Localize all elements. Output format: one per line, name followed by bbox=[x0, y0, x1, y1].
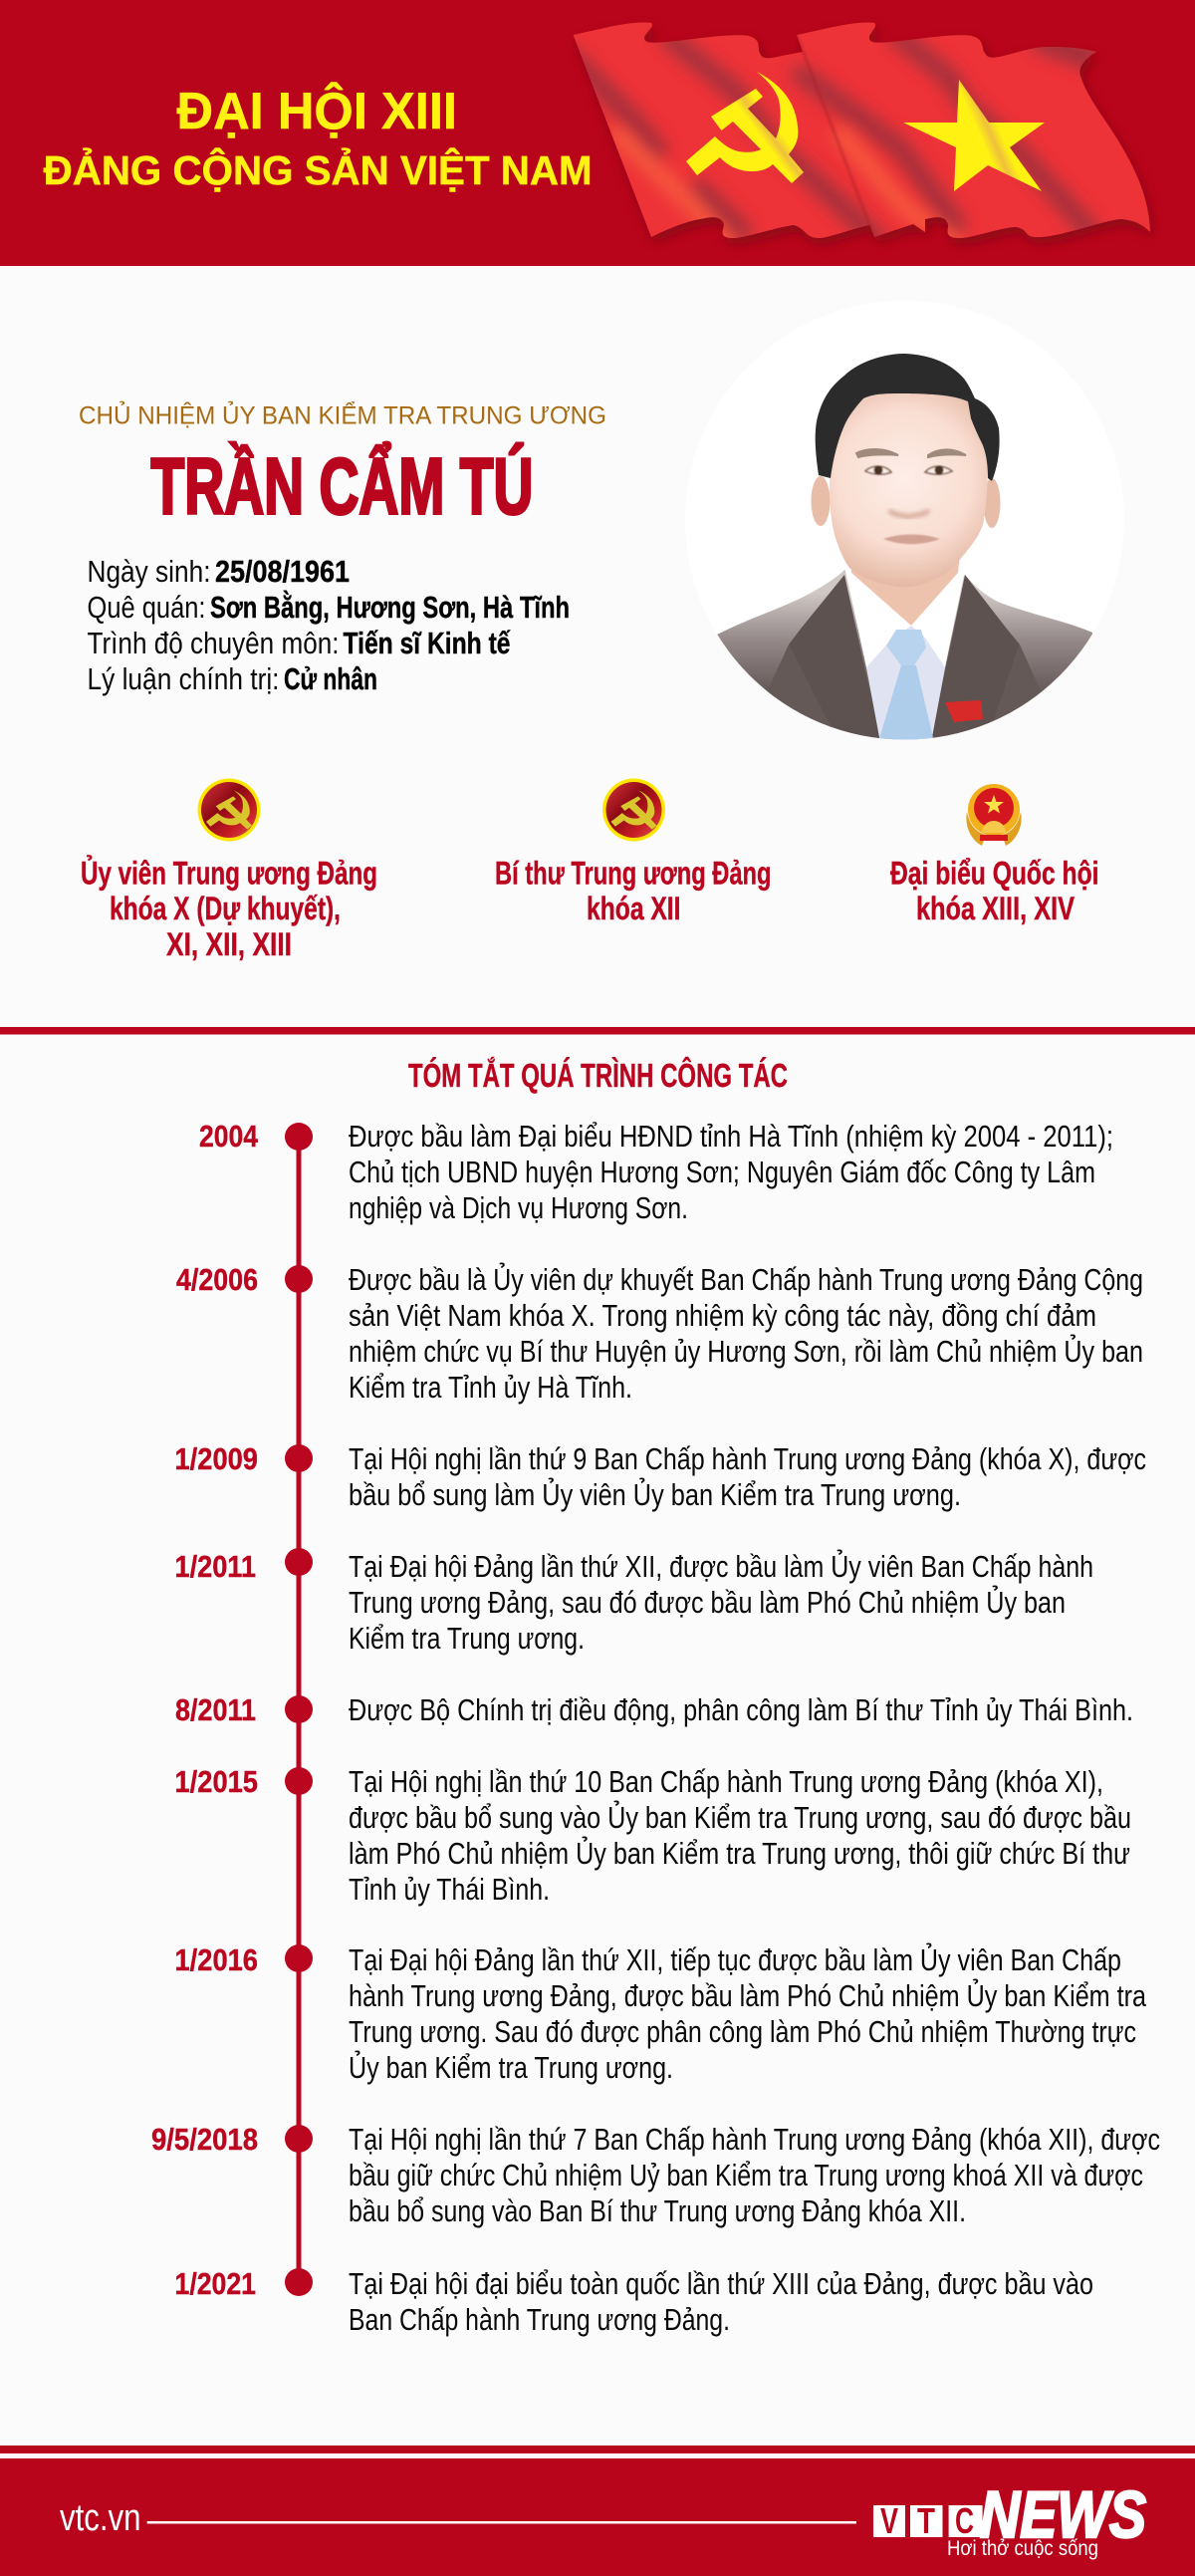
entry: 1/2021 bbox=[175, 2266, 1093, 2337]
timeline spine bbox=[297, 1137, 301, 2282]
logo: VTC News: T bbox=[917, 2500, 935, 2541]
footer bbox=[0, 2446, 1195, 2576]
timeline heading: TÓM TẮT QUÁ TRÌNH CÔNG TÁC bbox=[408, 1056, 788, 1094]
logo: VTC News: C bbox=[955, 2500, 974, 2541]
hair bbox=[816, 354, 1000, 481]
entry: 1/2021: Ban Chấp hành Trung ương Đảng. bbox=[349, 2303, 730, 2337]
role: central committee member: XI, XII, XIII bbox=[166, 926, 292, 962]
icon: party emblem bbox=[197, 779, 261, 841]
ears bbox=[811, 476, 831, 526]
role: central committee secretary: Bí thư Trung ương Đảng bbox=[495, 855, 771, 891]
icon: national emblem bbox=[966, 784, 1022, 846]
entry: 1/2015: 1/2015 bbox=[175, 1764, 258, 1799]
entry: 4/2006 bbox=[176, 1261, 1143, 1405]
jacket bbox=[717, 570, 1093, 739]
entry: 1/2015 bbox=[175, 1764, 1131, 1907]
role: central committee member: khóa X (Dự khuyết), bbox=[110, 891, 341, 926]
role: central committee secretary: khóa XII bbox=[587, 891, 681, 926]
portrait bbox=[717, 354, 1093, 739]
entry: 4/2006: 4/2006 bbox=[176, 1262, 258, 1297]
brows bbox=[856, 449, 898, 457]
entry: 1/2016 bbox=[175, 1941, 1146, 2085]
logo: VTC News bbox=[873, 2477, 1146, 2560]
site url: vtc.vn bbox=[60, 2497, 141, 2539]
entry: 1/2011: 1/2011 bbox=[175, 1549, 256, 1584]
role: national assembly deputy: khóa XIII, XIV bbox=[916, 891, 1076, 926]
name heading: TRẦN CẨM TÚ bbox=[151, 442, 534, 530]
logo: VTC News: NEWS bbox=[980, 2477, 1146, 2551]
icon: star bbox=[903, 80, 1045, 191]
subtitle: position: CHỦ NHIỆM ỦY BAN KIỂM TRA TRUNG ƯƠNG bbox=[79, 400, 606, 430]
entry: 9/5/2018: 9/5/2018 bbox=[151, 2122, 258, 2157]
entry: 9/5/2018 bbox=[151, 2122, 1160, 2228]
role: national assembly deputy: Đại biểu Quốc hội bbox=[890, 855, 1099, 891]
mouth bbox=[883, 534, 940, 544]
flags: party flag and national flag bbox=[570, 22, 1153, 244]
personal details: Quê quán: bbox=[88, 591, 205, 625]
role: central committee member: Ủy viên Trung ương Đảng bbox=[81, 855, 377, 891]
entry: 8/2011: 8/2011 bbox=[175, 1692, 256, 1727]
entry: 1/2009 bbox=[175, 1441, 1146, 1512]
entry: 1/2021: 1/2021 bbox=[175, 2266, 256, 2301]
personal details: Ngày sinh: bbox=[88, 555, 211, 589]
title: ĐẢNG CỘNG SẢN VIỆT NAM bbox=[44, 147, 593, 193]
role: national assembly deputy bbox=[890, 784, 1099, 926]
eyes bbox=[865, 466, 952, 474]
entry: 2004: 2004 bbox=[199, 1119, 259, 1154]
personal details: 25/08/1961 bbox=[215, 555, 350, 589]
entry: 9/5/2018: bầu bổ sung vào Ban Bí thư Trung ương Đảng khóa XII. bbox=[349, 2194, 966, 2228]
logo: VTC News: V bbox=[880, 2500, 898, 2541]
personal details: Lý luận chính trị: bbox=[88, 662, 279, 696]
entry: 1/2015: Tỉnh ủy Thái Bình. bbox=[349, 1873, 550, 1907]
icon: hammer and sickle bbox=[686, 72, 804, 183]
entry: 4/2006: Kiểm tra Tỉnh ủy Hà Tĩnh. bbox=[349, 1371, 632, 1405]
entry: 1/2016: Ủy ban Kiểm tra Trung ương. bbox=[349, 2049, 673, 2085]
personal details: Trình độ chuyên môn: bbox=[88, 627, 339, 660]
title bbox=[44, 82, 593, 193]
entry: 2004 bbox=[199, 1119, 1113, 1225]
role: central committee secretary bbox=[495, 779, 771, 926]
entry: 1/2011: Kiểm tra Trung ương. bbox=[349, 1622, 585, 1656]
neck bbox=[850, 560, 960, 626]
personal details bbox=[88, 555, 570, 696]
shirt bbox=[845, 571, 964, 742]
timeline bbox=[151, 1119, 1160, 2337]
title: ĐẠI HỘI XIII bbox=[177, 82, 457, 140]
entry: 1/2009: 1/2009 bbox=[175, 1441, 258, 1476]
entry: 1/2016: 1/2016 bbox=[175, 1942, 258, 1977]
entry: 1/2011 bbox=[175, 1548, 1093, 1656]
role: central committee member bbox=[81, 779, 377, 962]
nose bbox=[889, 510, 929, 517]
personal details: Tiến sĩ Kinh tế bbox=[343, 627, 511, 660]
tie bbox=[886, 630, 926, 665]
face bbox=[830, 384, 988, 587]
red pin bbox=[945, 700, 983, 722]
logo: VTC News: Hơi thở cuộc sống bbox=[947, 2537, 1098, 2560]
personal details: Sơn Bằng, Hương Sơn, Hà Tĩnh bbox=[210, 589, 570, 625]
entry: 2004: nghiệp và Dịch vụ Hương Sơn. bbox=[349, 1191, 688, 1225]
entry: 1/2009: bầu bổ sung làm Ủy viên Ủy ban Kiểm tra Trung ương. bbox=[349, 1476, 961, 1512]
icon: party emblem bbox=[602, 779, 665, 841]
entry: 1/2011: Trung ương Đảng, sau đó được bầu làm Phó Chủ nhiệm Ủy ban bbox=[349, 1584, 1066, 1620]
personal details: Cử nhân bbox=[284, 662, 377, 696]
header banner bbox=[0, 0, 1195, 266]
